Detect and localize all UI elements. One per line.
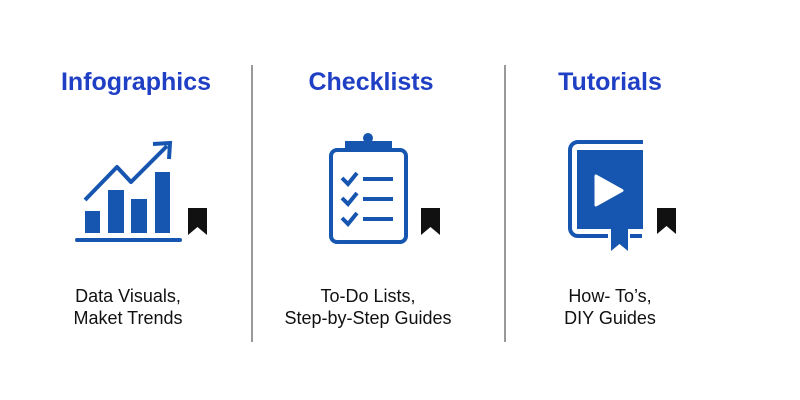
icon: clipboard bbox=[331, 133, 406, 242]
caption: tutorials: How- To’s, bbox=[568, 286, 652, 306]
icon: bookmark 2 bbox=[421, 208, 440, 235]
icon: book bbox=[570, 142, 643, 251]
icon: bookmark 1 bbox=[188, 208, 207, 235]
caption: checklists: Step-by-Step Guides bbox=[284, 308, 452, 328]
title: Checklists: Checklists bbox=[308, 68, 434, 96]
caption: infographics: Maket Trends bbox=[73, 308, 183, 328]
caption: checklists bbox=[284, 286, 452, 328]
title: Tutorials: Tutorials bbox=[558, 68, 662, 96]
caption: infographics: Data Visuals, bbox=[75, 286, 181, 306]
caption: tutorials: DIY Guides bbox=[564, 308, 656, 328]
icon: bookmark 3 bbox=[657, 208, 676, 234]
caption: checklists: To-Do Lists, bbox=[320, 286, 416, 306]
icon: chart bbox=[77, 143, 180, 240]
title: Infographics: Infographics bbox=[61, 68, 211, 96]
caption: infographics bbox=[73, 286, 183, 328]
caption: tutorials bbox=[564, 286, 656, 328]
